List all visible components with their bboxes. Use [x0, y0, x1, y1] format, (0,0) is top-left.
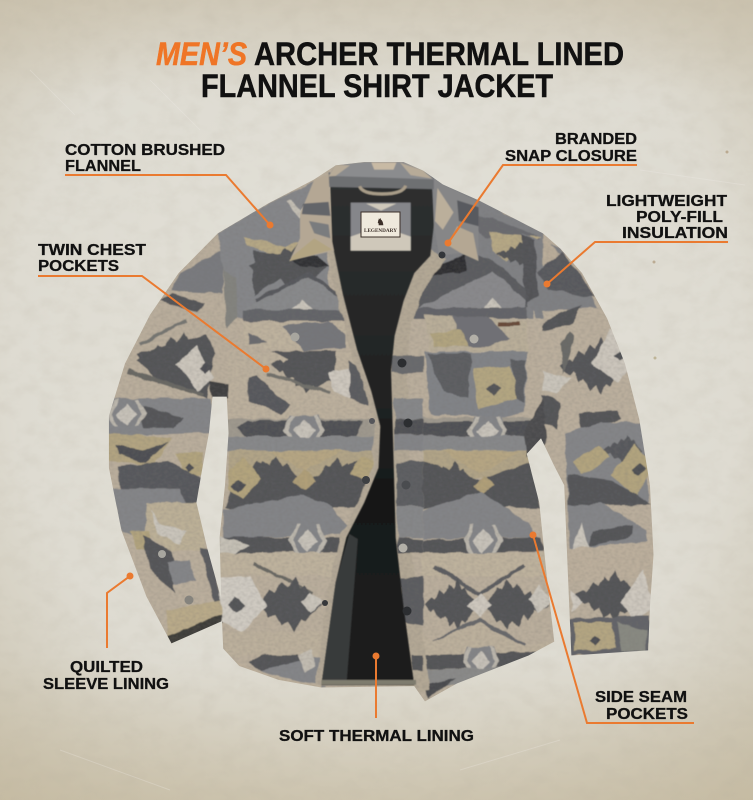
callout: twin chest pockets: [38, 242, 270, 372]
jacket base cloth: [100, 155, 660, 704]
left chest pattern: [218, 179, 346, 329]
title: FLANNEL SHIRT JACKET: [201, 68, 553, 104]
callout: twin chest pockets: TWIN CHEST: [38, 242, 146, 259]
callout: soft thermal lining: SOFT THERMAL LINING: [279, 728, 474, 745]
armpit shading: [209, 381, 546, 457]
right body pattern: [414, 416, 554, 699]
lining hem: [321, 680, 416, 685]
title: [156, 36, 624, 104]
right front placket: [391, 252, 436, 690]
callout: soft thermal lining: [279, 652, 474, 745]
callout: quilted sleeve lining: SLEEVE LINING: [43, 676, 169, 693]
neck patch: [351, 203, 411, 251]
callout: cotton brushed flannel: [65, 142, 274, 228]
inner thermal lining: [321, 186, 434, 685]
title: ARCHER THERMAL LINED: [254, 36, 624, 72]
callout: branded snap closure: [444, 131, 637, 246]
right chest pocket: [424, 314, 528, 417]
left body pattern: [220, 416, 382, 687]
callout: branded snap closure: SNAP CLOSURE: [505, 148, 637, 165]
callout: cotton brushed flannel: COTTON BRUSHED: [65, 142, 225, 159]
collar with hanger loop: [289, 162, 479, 261]
neck brand label: [361, 212, 400, 237]
neck brand label: ♞: [376, 217, 385, 227]
overall cloth tone: [109, 167, 654, 701]
left placket edge: [321, 242, 380, 685]
cloth grain: [109, 186, 653, 696]
jacket photo illustration: [93, 148, 671, 711]
neck brand label: LEGENDARY: [364, 228, 397, 234]
callout: twin chest pockets: POCKETS: [38, 258, 119, 275]
callout: side seam pockets: SIDE SEAM: [595, 689, 687, 706]
callout: lightweight poly-fill insulation: LIGHTWEIGHT: [606, 193, 727, 210]
title: MEN’S: [156, 36, 248, 72]
callout: branded snap closure: BRANDED: [555, 131, 637, 148]
snap buttons: [158, 252, 478, 616]
callout: lightweight poly-fill insulation: INSULATION: [622, 225, 728, 242]
callout: quilted sleeve lining: [43, 572, 169, 693]
right sleeve pattern: [521, 233, 654, 656]
callout: side seam pockets: POCKETS: [606, 706, 688, 723]
callout: quilted sleeve lining: QUILTED: [70, 659, 143, 676]
left sleeve pattern: [109, 250, 225, 644]
callout: lightweight poly-fill insulation: POLY-FILL: [636, 209, 723, 226]
callout: cotton brushed flannel: FLANNEL: [65, 158, 141, 175]
callout: side seam pockets: [530, 532, 694, 723]
left chest pocket: [246, 320, 369, 416]
right chest pattern: [414, 171, 545, 318]
callout: lightweight poly-fill insulation: [544, 193, 728, 288]
